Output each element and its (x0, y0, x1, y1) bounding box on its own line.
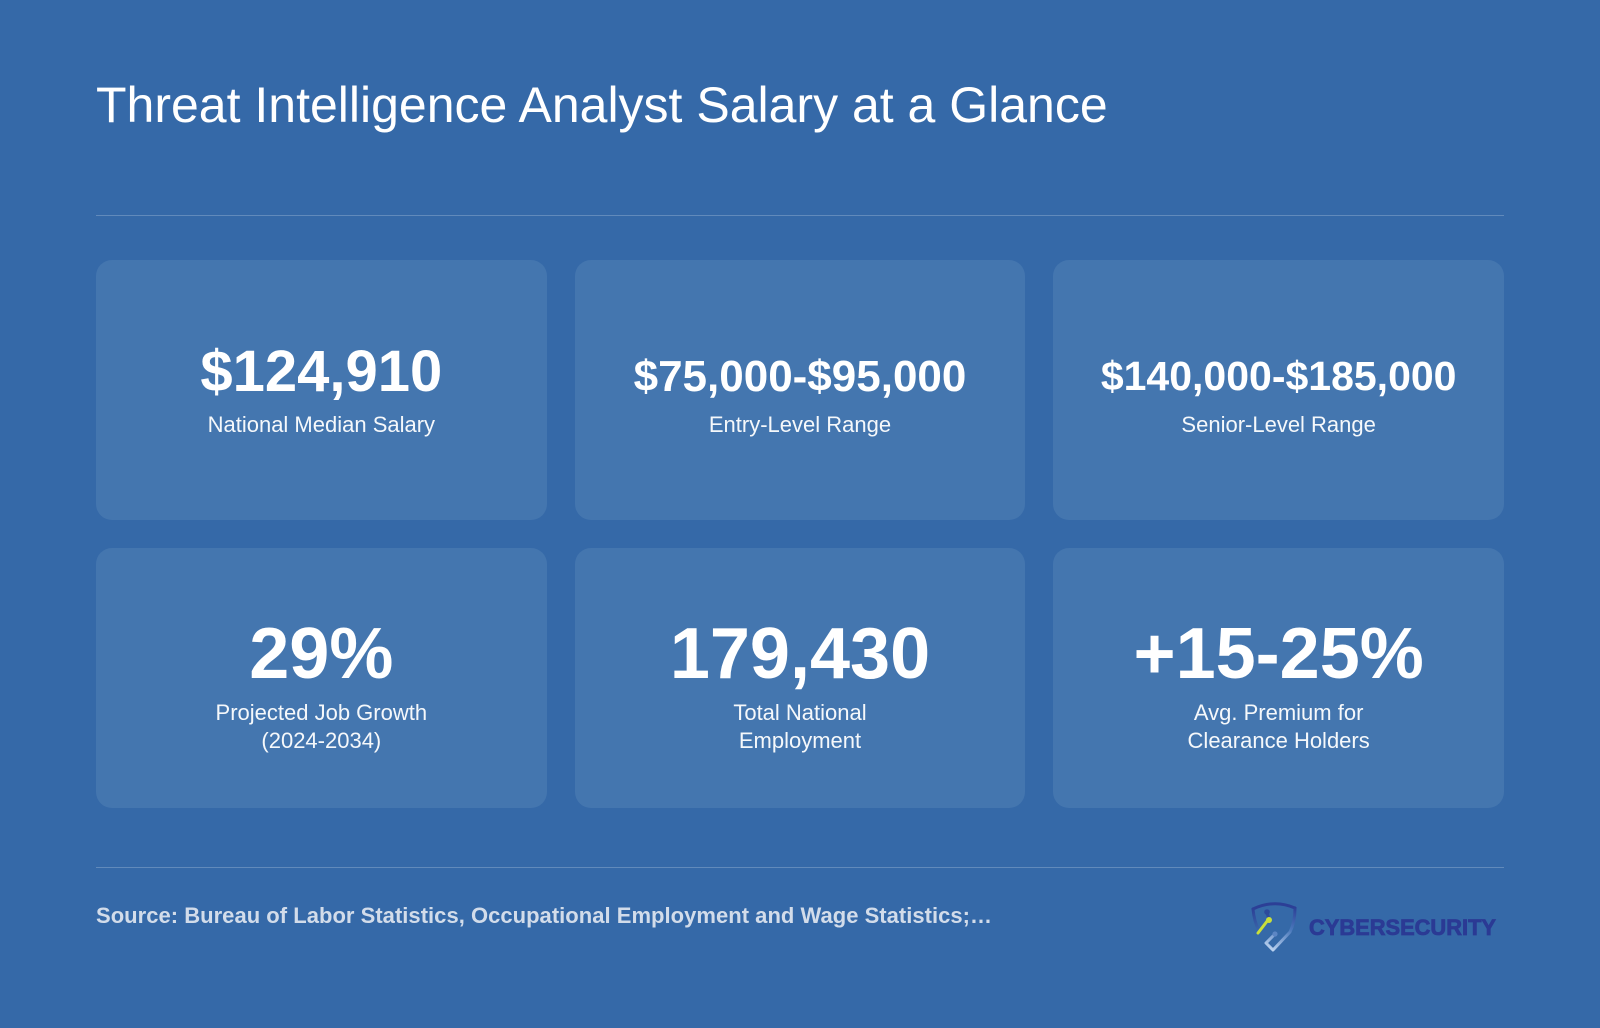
panel: senior-level range (1053, 260, 1504, 520)
logo: cybersecurity (1252, 902, 1496, 952)
stat label: entry-level range: Entry-Level Range (709, 412, 891, 436)
stat label: senior-level range: Senior-Level Range (1181, 412, 1376, 436)
panel: national median salary (96, 260, 547, 520)
stat value: entry-level range: $75,000-$95,000 (634, 352, 966, 400)
stat label: clearance premium (1188, 700, 1370, 753)
stat label: employment: Total National (733, 700, 867, 725)
stat label: median salary: National Median Salary (208, 412, 435, 436)
logo wordmark: CYBERSECURITY (1309, 915, 1496, 940)
stat value: job growth: 29% (249, 614, 393, 694)
stat value: employment: 179,430 (670, 614, 930, 694)
panel: total national employment (575, 548, 1025, 808)
stat label: clearance premium: Avg. Premium for (1194, 700, 1363, 725)
stat label: job growth: (2024-2034) (261, 728, 381, 753)
stat label: clearance premium: Clearance Holders (1188, 728, 1370, 753)
panel: projected job growth (96, 548, 547, 808)
stat label: job growth: Projected Job Growth (216, 700, 427, 725)
stat value: median salary: $124,910 (200, 339, 442, 404)
stat value: clearance premium: +15-25% (1134, 614, 1424, 694)
stat label: job growth (216, 700, 427, 753)
icon: shield (1253, 904, 1295, 950)
panel: entry-level range (575, 260, 1025, 520)
stat label: employment (733, 700, 867, 753)
stat label: employment: Employment (739, 728, 861, 753)
title: Threat Intelligence Analyst Salary at a Glance (96, 77, 1108, 133)
source note: Source: Bureau of Labor Statistics, Occupational Employment and Wage Statistics;… (96, 903, 992, 928)
panel: clearance premium (1053, 548, 1504, 808)
stat value: senior-level range: $140,000-$185,000 (1101, 353, 1456, 399)
